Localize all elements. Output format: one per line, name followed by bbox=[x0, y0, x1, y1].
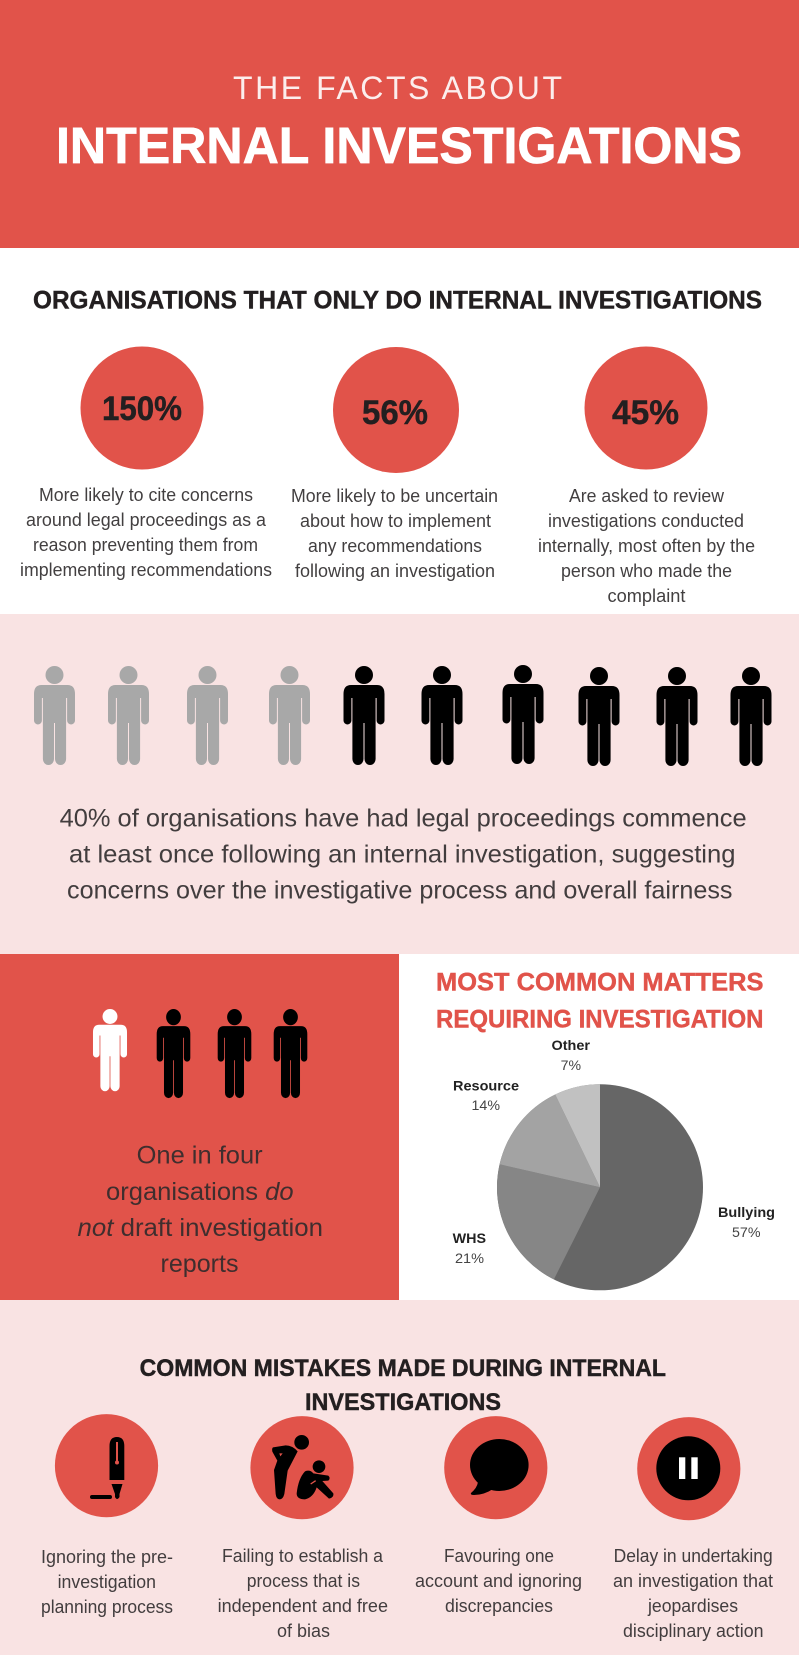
icon: pause button bbox=[637, 1417, 740, 1520]
icon: black person 3 bbox=[274, 1009, 307, 1098]
stat: 45%: 45% bbox=[612, 394, 679, 432]
text: mistake 3: Favouring one bbox=[444, 1546, 554, 1566]
stat: 45% bbox=[584, 346, 708, 470]
stat text: 45% description: Are asked to review bbox=[569, 486, 725, 506]
heading: common mistakes: COMMON MISTAKES MADE DURING INTERNAL bbox=[140, 1355, 666, 1382]
heading: common mistakes: INVESTIGATIONS bbox=[305, 1389, 501, 1416]
text: mistake 4: an investigation that bbox=[613, 1571, 773, 1591]
icon: white person bbox=[93, 1009, 127, 1091]
text: mistake 3: discrepancies bbox=[445, 1596, 553, 1616]
stat text: 56% description: any recommendations bbox=[308, 536, 482, 556]
icon: black person 3 bbox=[502, 665, 544, 764]
text: mistake 2: Failing to establish a bbox=[222, 1546, 384, 1566]
stat text: 150% description: implementing recommendations bbox=[20, 560, 272, 580]
title: the facts about: THE FACTS ABOUT bbox=[233, 70, 562, 106]
text: mistake 1 bbox=[41, 1547, 173, 1617]
panel: 40 percent legal proceedings bbox=[0, 614, 799, 954]
pictogram: ten people, four grey and six black bbox=[34, 665, 772, 766]
icon: black person 4 bbox=[578, 667, 620, 766]
stat text: 45% description: internally, most often by the bbox=[538, 536, 755, 556]
label: resource 14%: Resource bbox=[453, 1077, 519, 1093]
text: one in four statement: organisations do bbox=[106, 1178, 294, 1206]
label: bullying 57%: 57% bbox=[732, 1224, 760, 1240]
stat text: 56% description bbox=[291, 486, 498, 581]
stat text: 45% description: person who made the bbox=[561, 561, 732, 581]
text: 40 percent statement: at least once following an internal investigation, suggesting bbox=[69, 841, 735, 869]
stat text: 150% description bbox=[20, 485, 272, 580]
icon: grey person 3 bbox=[187, 666, 228, 765]
label: other 7% bbox=[552, 1037, 591, 1073]
icon: speech bubble bbox=[444, 1416, 547, 1519]
text: mistake 4: Delay in undertaking bbox=[614, 1546, 773, 1566]
text: 40 percent statement: 40% of organisations have had legal proceedings commence bbox=[60, 805, 747, 833]
text: mistake 2: process that is bbox=[247, 1571, 360, 1591]
stat text: 150% description: around legal proceedings as a bbox=[26, 510, 267, 530]
panel: one in four organisations bbox=[0, 954, 399, 1300]
icon: two people, one standing over one sitting bbox=[250, 1416, 354, 1519]
stat text: 150% description: reason preventing them from bbox=[33, 535, 258, 555]
text: mistake 3 bbox=[415, 1546, 582, 1616]
text: mistake 3: account and ignoring bbox=[415, 1571, 582, 1591]
label: other 7%: 7% bbox=[561, 1057, 581, 1073]
pictogram: four people, one white and three black bbox=[93, 1009, 307, 1098]
panel: organisations that only do internal investigations bbox=[0, 248, 799, 614]
stat text: 45% description bbox=[538, 486, 755, 606]
label: bullying 57% bbox=[718, 1204, 775, 1240]
label: WHS 21% bbox=[453, 1230, 486, 1266]
label: resource 14% bbox=[453, 1077, 519, 1113]
stat: 56%: 56% bbox=[362, 394, 428, 432]
stat: 150%: 150% bbox=[102, 390, 182, 428]
icon: black person 2 bbox=[218, 1009, 251, 1098]
text: one in four statement bbox=[78, 1142, 323, 1278]
text: mistake 1: planning process bbox=[41, 1597, 173, 1617]
label: WHS 21%: WHS bbox=[453, 1230, 486, 1246]
icon: grey person 4 bbox=[269, 666, 310, 765]
text: 40 percent statement: concerns over the investigative process and overall fairness bbox=[67, 877, 732, 905]
heading: most common matters bbox=[436, 969, 764, 1033]
title: internal investigations: INTERNAL INVESTIGATIONS bbox=[56, 117, 742, 174]
text: mistake 2 bbox=[218, 1546, 388, 1641]
icon: black person 1 bbox=[157, 1009, 190, 1098]
icon: grey person 1 bbox=[34, 666, 75, 765]
text: mistake 2: independent and free bbox=[218, 1596, 388, 1616]
stat text: 56% description: about how to implement bbox=[300, 511, 491, 531]
text: one in four statement: not draft investigation bbox=[78, 1214, 323, 1242]
heading: common mistakes bbox=[140, 1355, 666, 1416]
panel: most common matters pie chart bbox=[399, 954, 799, 1300]
panel: header banner bbox=[0, 0, 799, 248]
stat: 150% bbox=[80, 346, 204, 470]
stat text: 45% description: investigations conducted bbox=[548, 511, 744, 531]
icon: black person 6 bbox=[730, 667, 772, 766]
text: mistake 4: jeopardises bbox=[647, 1596, 738, 1616]
icon: grey person 2 bbox=[108, 666, 149, 765]
chart: pie of matters bbox=[497, 1084, 703, 1290]
text: one in four statement: reports bbox=[160, 1250, 238, 1278]
label: other 7%: Other bbox=[552, 1037, 591, 1053]
panel: common mistakes bbox=[0, 1300, 799, 1655]
heading: organisations section: ORGANISATIONS THAT ONLY DO INTERNAL INVESTIGATIONS bbox=[33, 286, 762, 314]
label: bullying 57%: Bullying bbox=[718, 1204, 775, 1220]
icon: pen bbox=[55, 1414, 158, 1517]
icon: black person 2 bbox=[422, 666, 462, 765]
label: WHS 21%: 21% bbox=[455, 1250, 484, 1266]
text: mistake 1: Ignoring the pre- bbox=[41, 1547, 173, 1567]
text: one in four statement: One in four bbox=[137, 1142, 263, 1170]
text: mistake 1: investigation bbox=[58, 1572, 156, 1592]
stat text: 150% description: More likely to cite concerns bbox=[39, 485, 253, 505]
heading: most common matters: REQUIRING INVESTIGATION bbox=[436, 1005, 764, 1033]
text: mistake 4: disciplinary action bbox=[623, 1621, 764, 1641]
text: mistake 4 bbox=[613, 1546, 773, 1641]
stat text: 56% description: following an investigation bbox=[295, 561, 495, 581]
label: resource 14%: 14% bbox=[472, 1097, 500, 1113]
icon: black person 1 bbox=[344, 666, 384, 765]
icon: black person 5 bbox=[656, 667, 698, 766]
stat text: 56% description: More likely to be uncertain bbox=[291, 486, 498, 506]
text: mistake 2: of bias bbox=[277, 1621, 330, 1641]
stat text: 45% description: complaint bbox=[608, 586, 686, 606]
stat: 56% bbox=[333, 347, 459, 473]
heading: most common matters: MOST COMMON MATTERS bbox=[436, 969, 764, 997]
text: 40 percent statement bbox=[60, 805, 747, 905]
